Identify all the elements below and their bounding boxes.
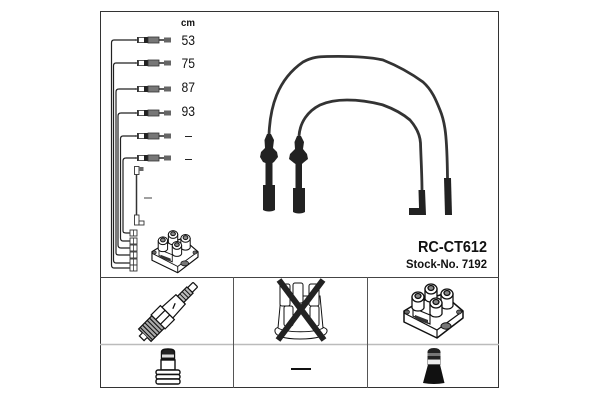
- icon: ignition coil: [404, 284, 463, 338]
- length values: –: [185, 150, 192, 166]
- icon: spark plug: [135, 278, 202, 345]
- product name: RC-CT612: [418, 239, 487, 256]
- dash: not applicable: [291, 368, 311, 370]
- terminal connectors with lengths: [135, 37, 171, 161]
- length values: 75: [182, 55, 195, 71]
- wire diagram: single loose cable: [134, 166, 152, 225]
- stock number: Stock-No. 7192: [406, 259, 487, 271]
- length values: 93: [182, 103, 195, 119]
- icon: coil boot, solid: [423, 348, 444, 384]
- wiring diagram: harness lines: [112, 40, 136, 268]
- chart frame and grid: [100, 12, 499, 388]
- coil-end connectors: [130, 230, 137, 271]
- length unit label: cm: [181, 18, 195, 29]
- small ignition coil icon: [152, 231, 198, 273]
- icon: spark plug boot, ribbed: [156, 349, 180, 384]
- length values: 53: [182, 32, 195, 48]
- icon: distributor cap crossed out: [275, 280, 327, 340]
- photo: ignition cable set: [260, 56, 452, 215]
- length values: 87: [182, 79, 195, 95]
- length values: –: [185, 127, 192, 143]
- length values: [182, 32, 195, 166]
